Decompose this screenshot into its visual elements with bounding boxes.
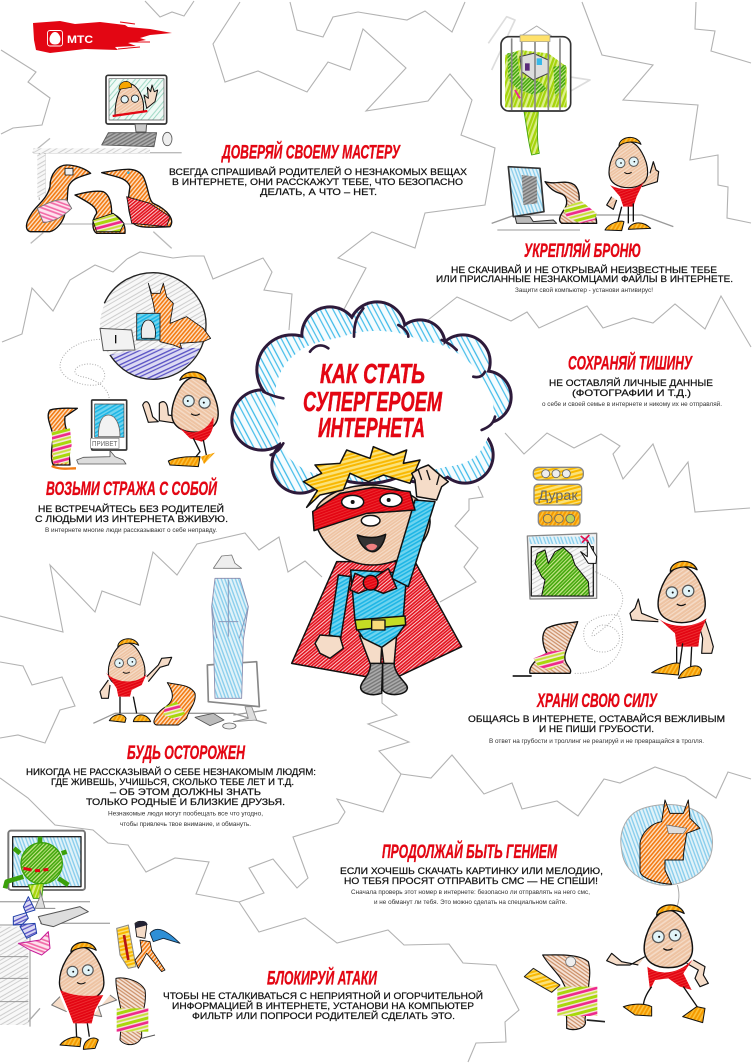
logo: MTS red brush (33, 21, 172, 53)
illustration: crystal ball, dog, monitor and egg hero (48, 272, 218, 469)
body text: НЕ ОСТАВЛЯЙ ЛИЧНЫЕ ДАННЫЕ (549, 377, 713, 389)
legs (359, 635, 382, 665)
title (303, 358, 442, 443)
tip: take a guard along: С ЛЮДЬМИ ИЗ ИНТЕРНЕТА ВЖИВУЮ. (35, 514, 228, 525)
left arm (329, 575, 351, 638)
heading: УКРЕПЛЯЙ БРОНЮ (524, 240, 641, 262)
tip: be careful: – ОБ ЭТОМ ДОЛЖНЫ ЗНАТЬ (110, 787, 261, 798)
hair (303, 447, 420, 507)
nose (361, 515, 380, 526)
heading: ХРАНИ СВОЮ СИЛУ (536, 691, 658, 712)
illustration: chat bubbles, troll window, dog and egg hero: Дурак (538, 487, 579, 503)
mask (313, 487, 415, 531)
tip: be careful: чтобы привлечь твое внимание, и обмануть. (120, 822, 251, 828)
note: Защити свой компьютер - установи антивирус! (515, 287, 653, 294)
heading: БЛОКИРУЙ АТАКИ (267, 968, 377, 990)
briefs (357, 624, 406, 647)
tip: strengthen the armour: ИЛИ ПРИСЛАННЫЕ НЕЗНАКОМЦАМИ ФАЙЛЫ В ИНТЕРНЕТЕ. (436, 273, 733, 285)
illustration: chat bubbles, troll window, dog and egg hero (513, 467, 713, 678)
heading: ДОВЕРЯЙ СВОЕМУ МАСТЕРУ (221, 142, 401, 164)
illustration: dachshunds at the desk with computer (26, 75, 182, 248)
note: о себе и своей семье в интернете и никому их не отправляй. (542, 401, 722, 408)
belt (355, 616, 406, 630)
raised arm (392, 500, 435, 587)
tip: trust your master: ДЕЛАТЬ, А ЧТО – НЕТ. (260, 187, 377, 198)
fist (412, 465, 448, 500)
tip: be careful: ТОЛЬКО РОДНЫЕ И БЛИЗКИЕ ДРУЗЬЯ. (86, 797, 285, 808)
tip: stay a genius: НО ТЕБЯ ПРОСЯТ ОТПРАВИТЬ СМС — НЕ СПЕШИ! (344, 876, 598, 887)
illustration: superhero boy (292, 447, 462, 695)
body text: НЕ СКАЧИВАЙ И НЕ ОТКРЫВАЙ НЕИЗВЕСТНЫЕ ТЕБЕ (451, 264, 717, 276)
illustration: caged virus, computer, dog and egg hero (488, 17, 673, 231)
tip: block attacks (163, 968, 483, 1022)
tip: block attacks: ФИЛЬТР ИЛИ ПОПРОСИ РОДИТЕЛЕЙ СДЕЛАТЬ ЭТО. (192, 1010, 455, 1022)
illustration: virus attack on monitor, desk, mini hero, egg and dog (0, 831, 180, 1049)
note: В интернете многие люди рассказывают о себе неправду. (45, 528, 217, 534)
cloud fill (233, 303, 510, 492)
tip: stay a genius: и не обманут ли тебя. Это можно сделать на специальном сайте. (374, 899, 567, 906)
tip: keep your power (468, 691, 725, 745)
heading: ПРОДОЛЖАЙ БЫТЬ ГЕНИЕМ (382, 841, 558, 863)
tip: be careful (26, 743, 316, 828)
body text: НЕ ВСТРЕЧАЙТЕСЬ БЕЗ РОДИТЕЛЕЙ (38, 503, 224, 515)
cloud outline (230, 300, 513, 495)
body text: НИКОГДА НЕ РАССКАЗЫВАЙ О СЕБЕ НЕЗНАКОМЫМ ЛЮДЯМ: (26, 766, 316, 778)
torso (351, 570, 407, 621)
note: Сначала проверь этот номер в интернете: безопасно ли отправлять на него смс, (351, 890, 590, 896)
heading: БУДЬ ОСТОРОЖЕН (127, 743, 246, 764)
head (315, 485, 430, 565)
title: СУПЕРГЕРОЕМ (303, 386, 442, 417)
tip: stay a genius (340, 841, 603, 906)
title: ИНТЕРНЕТА (318, 412, 425, 443)
note: Незнакомые люди могут пообещать все что угодно, (108, 812, 263, 818)
logo: MTS red brush: МТС (67, 34, 93, 46)
tip: keep silence: (ФОТОГРАФИИ И Т.Д.) (572, 388, 691, 399)
tip: trust your master (169, 142, 468, 198)
cape (292, 562, 462, 677)
boots (361, 663, 383, 695)
tip: keep silence (542, 352, 722, 408)
tip: strengthen the armour (436, 240, 733, 294)
illustration: thought cloud with title (230, 300, 513, 495)
illustration: trench coat scammer, egg hero and dog (93, 555, 267, 729)
tip: block attacks: ИНФОРМАЦИЕЙ В ИНТЕРНЕТЕ, УСТАНОВИ НА КОМПЬЮТЕР (172, 1000, 474, 1012)
note: В ответ на грубости и троллинг не реагируй и не превращайся в тролля. (489, 738, 704, 745)
heading: ВОЗЬМИ СТРАЖА С СОБОЙ (46, 478, 217, 500)
body text: ЕСЛИ ХОЧЕШЬ СКАЧАТЬ КАРТИНКУ ИЛИ МЕЛОДИЮ, (340, 866, 603, 877)
body text: ОБЩАЯСЬ В ИНТЕРНЕТЕ, ОСТАВАЙСЯ ВЕЖЛИВЫМ (468, 713, 725, 725)
illustration: fox thought bubble, egg hero and dog with tablet (524, 800, 712, 1030)
mouth (357, 534, 386, 552)
cloud cusps (263, 308, 495, 455)
tip: be careful: ГДЕ ЖИВЕШЬ, УЧИШЬСЯ, СКОЛЬКО ТЕБЕ ЛЕТ И Т.Д. (51, 777, 294, 788)
tip: take a guard along (35, 478, 228, 534)
body text: ЧТОБЫ НЕ СТАЛКИВАТЬСЯ С НЕПРИЯТНОЙ И ОГОРЧИТЕЛЬНОЙ (163, 990, 483, 1002)
title: КАК СТАТЬ (320, 358, 425, 389)
scarf (350, 568, 397, 593)
white cloud centre (275, 331, 494, 474)
tip: keep your power: И НЕ ПИШИ ГРУБОСТИ. (539, 724, 654, 735)
body text: ВСЕГДА СПРАШИВАЙ РОДИТЕЛЕЙ О НЕЗНАКОМЫХ ВЕЩАХ (169, 166, 468, 178)
illustration: crystal ball, dog, monitor and egg hero: ПРИВЕТ (92, 441, 118, 448)
tip: trust your master: В ИНТЕРНЕТЕ, ОНИ РАССКАЖУТ ТЕБЕ, ЧТО БЕЗОПАСНО (172, 177, 463, 188)
eyes (342, 495, 364, 509)
